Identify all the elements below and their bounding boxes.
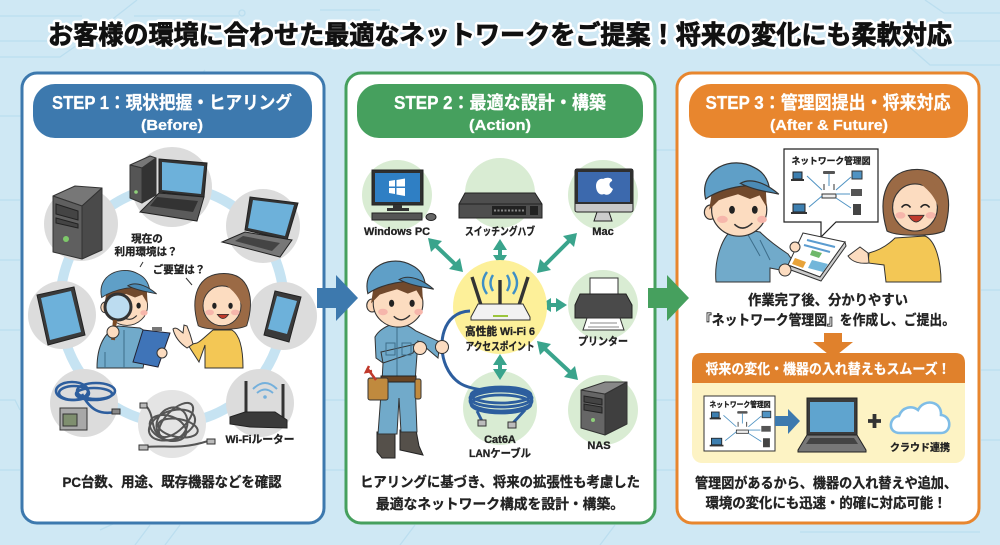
label: switching hub: スイッチングハブ [465, 224, 535, 238]
step 2 header: (Action) [469, 117, 531, 134]
step 3 header [689, 84, 968, 138]
label: Cat6A cable: LANケーブル [469, 446, 531, 460]
down arrow [813, 333, 853, 358]
caption: step 2 [360, 474, 640, 512]
mini diagram: ネットワーク管理図 [710, 399, 770, 409]
illustration: technician with cable [366, 261, 484, 458]
mini diagram [704, 396, 775, 451]
speech: current environment [114, 232, 178, 267]
icon: smartphone [249, 282, 317, 350]
speech: requests [153, 263, 205, 285]
label: Wi-Fi router: Wi-Fiルーター [226, 433, 294, 446]
arrow: step 2 to step 3 [648, 275, 689, 321]
icon: switching hub [459, 158, 542, 228]
step 1 header: (Before) [141, 117, 203, 134]
label: Mac: Mac [592, 226, 614, 238]
label: cloud: クラウド連携 [890, 441, 950, 454]
caption: step 3: 環境の変化にも迅速・的確に対応可能！ [706, 495, 946, 511]
icon: Windows PC [362, 160, 436, 230]
document: network report [779, 233, 846, 281]
icon: laptop [798, 398, 866, 452]
step 2 header: STEP 2：最適な設計・構築 [394, 92, 606, 113]
icon: tower PC [44, 186, 118, 261]
label: NAS: NAS [587, 440, 611, 452]
icon: blue cable and adapter [50, 369, 120, 437]
arrow: diagram to laptop [775, 409, 800, 434]
speech bubble: network diagram: ネットワーク管理図 [792, 155, 870, 166]
step 2 header [357, 84, 643, 138]
icon: desktop and laptop [130, 147, 212, 227]
icon: NAS [568, 375, 638, 445]
caption: after completion [699, 292, 955, 328]
caption: after completion: 『ネットワーク管理図』を作成し、ご提出。 [699, 312, 955, 328]
caption: step 2: ヒアリングに基づき、将来の拡張性も考慮した [360, 474, 640, 490]
caption: step 3: 管理図があるから、機器の入れ替えや追加、 [695, 475, 957, 491]
speech bubble: network diagram [784, 149, 878, 237]
label: printer: プリンター [578, 335, 628, 348]
speech: requests: ご要望は？ [153, 263, 205, 276]
arrows: connections [428, 233, 578, 380]
panel: step 2 [346, 73, 655, 523]
speech: current environment: 現在の [131, 232, 163, 245]
access point: 高性能 Wi-Fi 6 [465, 324, 535, 338]
step 1 header [33, 84, 312, 138]
icon: cloud [891, 403, 949, 433]
icon: Mac [568, 160, 638, 230]
icon: tangled LAN cable [138, 390, 215, 458]
title: お客様の環境に合わせた最適なネットワークをご提案！将来の変化にも柔軟対応 [48, 20, 952, 50]
illustration: smiling customer [848, 169, 948, 282]
box: future changes [692, 353, 965, 463]
label: Cat6A cable: Cat6A [484, 434, 516, 446]
panel: step 1 [22, 73, 324, 523]
illustration: technician handing over document [704, 163, 795, 282]
icon: Cat6A cable [463, 371, 537, 445]
label: Windows PC: Windows PC [364, 226, 430, 238]
panel: step 3 [677, 73, 979, 523]
access point [453, 260, 547, 354]
title: お客様の環境に合わせた最適なネットワークをご提案！将来の変化にも柔軟対応 [48, 20, 952, 50]
label: Cat6A cable [469, 434, 531, 460]
speech: current environment: 利用環境は？ [114, 245, 178, 258]
illustration: customer woman [173, 274, 250, 368]
caption: step 3 [695, 475, 957, 511]
icon: Wi-Fi router [226, 369, 294, 437]
access point: アクセスポイント [466, 340, 534, 353]
box: future changes: 将来の変化・機器の入れ替えもスムーズ！ [706, 361, 950, 377]
arrow: step 1 to step 2 [317, 275, 358, 321]
icon: tablet [28, 281, 96, 349]
illustration: technician with magnifier [97, 270, 170, 368]
plus sign [868, 414, 881, 428]
step 3 header: (After & Future) [770, 117, 888, 134]
caption: step 2: 最適なネットワーク構成を設計・構築。 [376, 496, 624, 512]
caption: step 1: PC台数、用途、既存機器などを確認 [62, 474, 282, 490]
device ring [60, 187, 284, 423]
icon: printer [568, 270, 638, 340]
caption: after completion: 作業完了後、分かりやすい [748, 292, 908, 308]
step 3 header: STEP 3：管理図提出・将来対応 [706, 92, 950, 113]
step 1 header: STEP 1：現状把握・ヒアリング [52, 92, 292, 113]
icon: laptop [222, 189, 300, 263]
